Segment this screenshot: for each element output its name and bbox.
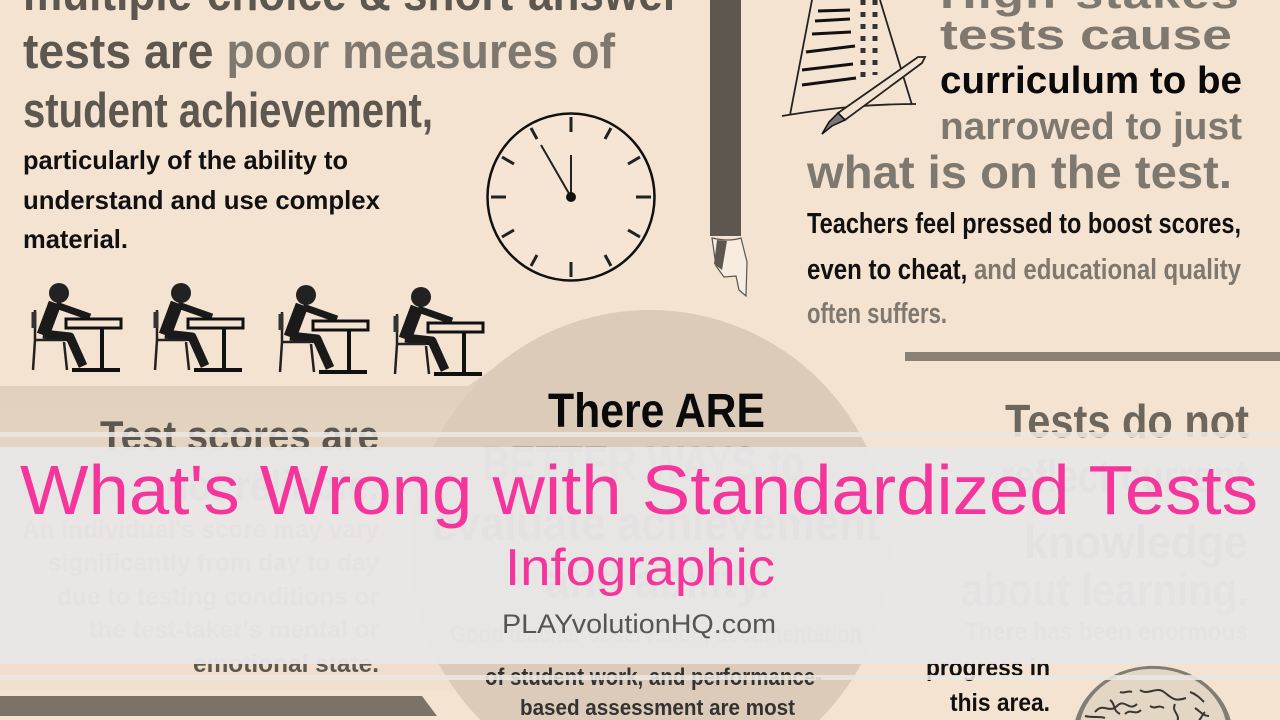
body text: tests do not: There has been enormous — [965, 618, 1248, 646]
site credit: PLAYvolutionHQ.com — [502, 609, 776, 639]
heading: tests do not — [961, 395, 1249, 616]
body text: tests do not: this area. — [950, 689, 1050, 717]
body text: test scores: An individual's score may vary — [22, 516, 379, 544]
panel: poor measures — [23, 0, 680, 254]
heading: test scores — [100, 412, 379, 509]
body text: better ways: Good teacher observation, documentation — [450, 621, 862, 648]
body text: test scores — [22, 516, 379, 678]
body text: poor measures: particularly of the ability to — [23, 145, 348, 175]
heading: narrowed curriculum: curriculum to be — [940, 60, 1242, 102]
central circle — [410, 310, 890, 720]
body text: poor measures: material. — [23, 224, 128, 254]
heading: tests do not: Tests do not — [1005, 395, 1249, 447]
bottom-left bar — [0, 696, 437, 716]
body text: better ways — [450, 621, 862, 720]
body text: better ways: based assessment are most — [520, 695, 796, 720]
heading: narrowed curriculum: narrowed to just — [940, 106, 1242, 148]
body text: narrowed curriculum: often suffers. — [807, 298, 947, 330]
left band — [0, 360, 520, 690]
body text: better ways: of student work, and performance- — [485, 664, 822, 691]
icon: test sheet and pencil — [782, 0, 925, 134]
body text: poor measures: understand and use complex — [23, 185, 381, 215]
body text: narrowed curriculum — [807, 208, 1241, 330]
body text: test scores: emotional state. — [193, 650, 379, 678]
heading: better ways: and ability. — [545, 555, 770, 608]
heading: better ways — [432, 385, 880, 608]
panel: test scores unreliable — [22, 412, 379, 678]
panel: better ways — [432, 385, 880, 720]
icons: students at desks — [33, 283, 483, 374]
heading: poor measures: tests are poor measures of — [23, 25, 616, 79]
heading: test scores: Test scores are — [100, 412, 379, 459]
icon: clock — [488, 114, 654, 280]
banner band — [0, 432, 1280, 680]
heading: poor measures — [23, 0, 680, 138]
heading: test scores: not reliable. — [165, 462, 379, 509]
heading: tests do not: knowledge — [1024, 516, 1248, 568]
body text: tests do not: progress in — [926, 654, 1050, 682]
panel: narrowed curriculum — [806, 0, 1242, 330]
divider bar: right — [905, 352, 1280, 361]
heading: better ways: There ARE — [548, 385, 765, 438]
heading: narrowed curriculum — [806, 0, 1242, 198]
body text: test scores: significantly from day to day — [48, 549, 379, 577]
panel: tests do not reflect — [926, 395, 1249, 717]
body text: poor measures — [23, 145, 381, 254]
heading: better ways: evaluate achievement — [432, 498, 880, 551]
heading: narrowed curriculum: what is on the test. — [806, 146, 1232, 198]
body text: test scores: due to testing conditions or — [57, 583, 379, 611]
body text: tests do not — [926, 618, 1248, 717]
icon: brain — [1075, 666, 1231, 720]
heading: poor measures: student achievement, — [23, 84, 433, 138]
heading: narrowed curriculum: tests cause — [940, 11, 1232, 58]
heading: better ways: BETTER WAYS to — [482, 438, 805, 491]
subtitle: Infographic — [505, 539, 775, 597]
icon: pointing arm — [710, 0, 747, 296]
title: What's Wrong with Standardized Tests — [20, 451, 1258, 529]
body text: test scores: the test-taker's mental or — [89, 616, 379, 644]
